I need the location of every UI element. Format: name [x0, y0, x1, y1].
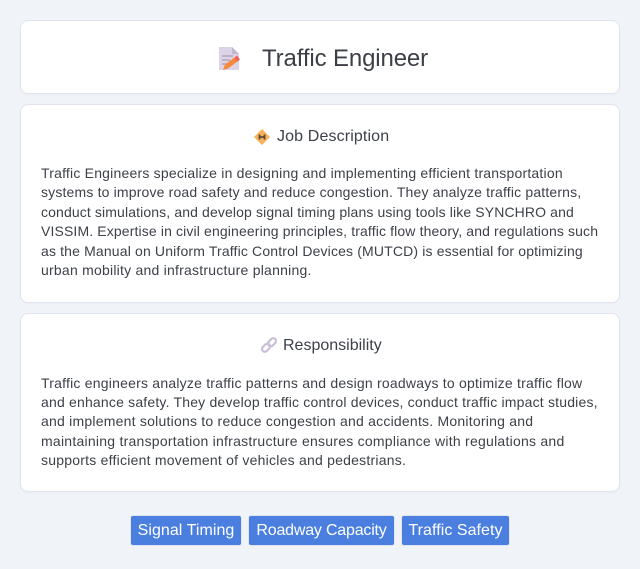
tag: traffic safety: Traffic Safety: [408, 522, 503, 539]
title: Traffic Engineer: [262, 45, 428, 72]
tag: traffic safety: [402, 516, 509, 545]
heading: responsibility: Responsibility: [283, 337, 382, 354]
text block: responsibility: Traffic engineers analyze traffic patterns and design roadways to optimize traffic flow: [41, 375, 582, 391]
tag: roadway capacity: [249, 516, 394, 545]
text block: job description: Traffic Engineers specialize in designing and implementing efficient transportation: [41, 165, 563, 181]
text block: job description: VISSIM. Expertise in civil engineering principles, traffic flow theory, and regulations such: [41, 223, 598, 239]
panel: job description: [20, 104, 620, 303]
text block: job description: systems to improve road safety and reduce congestion. They analyze traffic patterns,: [41, 184, 581, 200]
text block: job description: urban mobility and infrastructure planning.: [41, 262, 312, 278]
panel: responsibility: [20, 313, 620, 492]
text block: responsibility: and implement solutions to reduce congestion and accidents. Monitoring and: [41, 413, 533, 429]
tag: signal timing: Signal Timing: [138, 522, 234, 539]
text block: responsibility: maintaining transportation infrastructure ensures compliance with regulations and: [41, 433, 565, 449]
icon: chain link: [261, 337, 278, 353]
icon: document with pencil: [219, 47, 240, 70]
heading: job description: Job Description: [277, 128, 389, 145]
tag: signal timing: [131, 516, 241, 545]
text block: job description: conduct simulations, and develop signal timing plans using tools like SYNCHRO and: [41, 204, 574, 220]
text block: responsibility: supports efficient movement of vehicles and pedestrians.: [41, 452, 406, 468]
text block: job description: as the Manual on Uniform Traffic Control Devices (MUTCD) is essential for optimizing: [41, 243, 583, 259]
panel: title card: [20, 20, 620, 94]
tag: roadway capacity: Roadway Capacity: [256, 522, 387, 539]
icon: road sign: [254, 129, 270, 145]
text block: responsibility: and enhance safety. They develop traffic control devices, conduct traffic impact studies,: [41, 394, 598, 410]
